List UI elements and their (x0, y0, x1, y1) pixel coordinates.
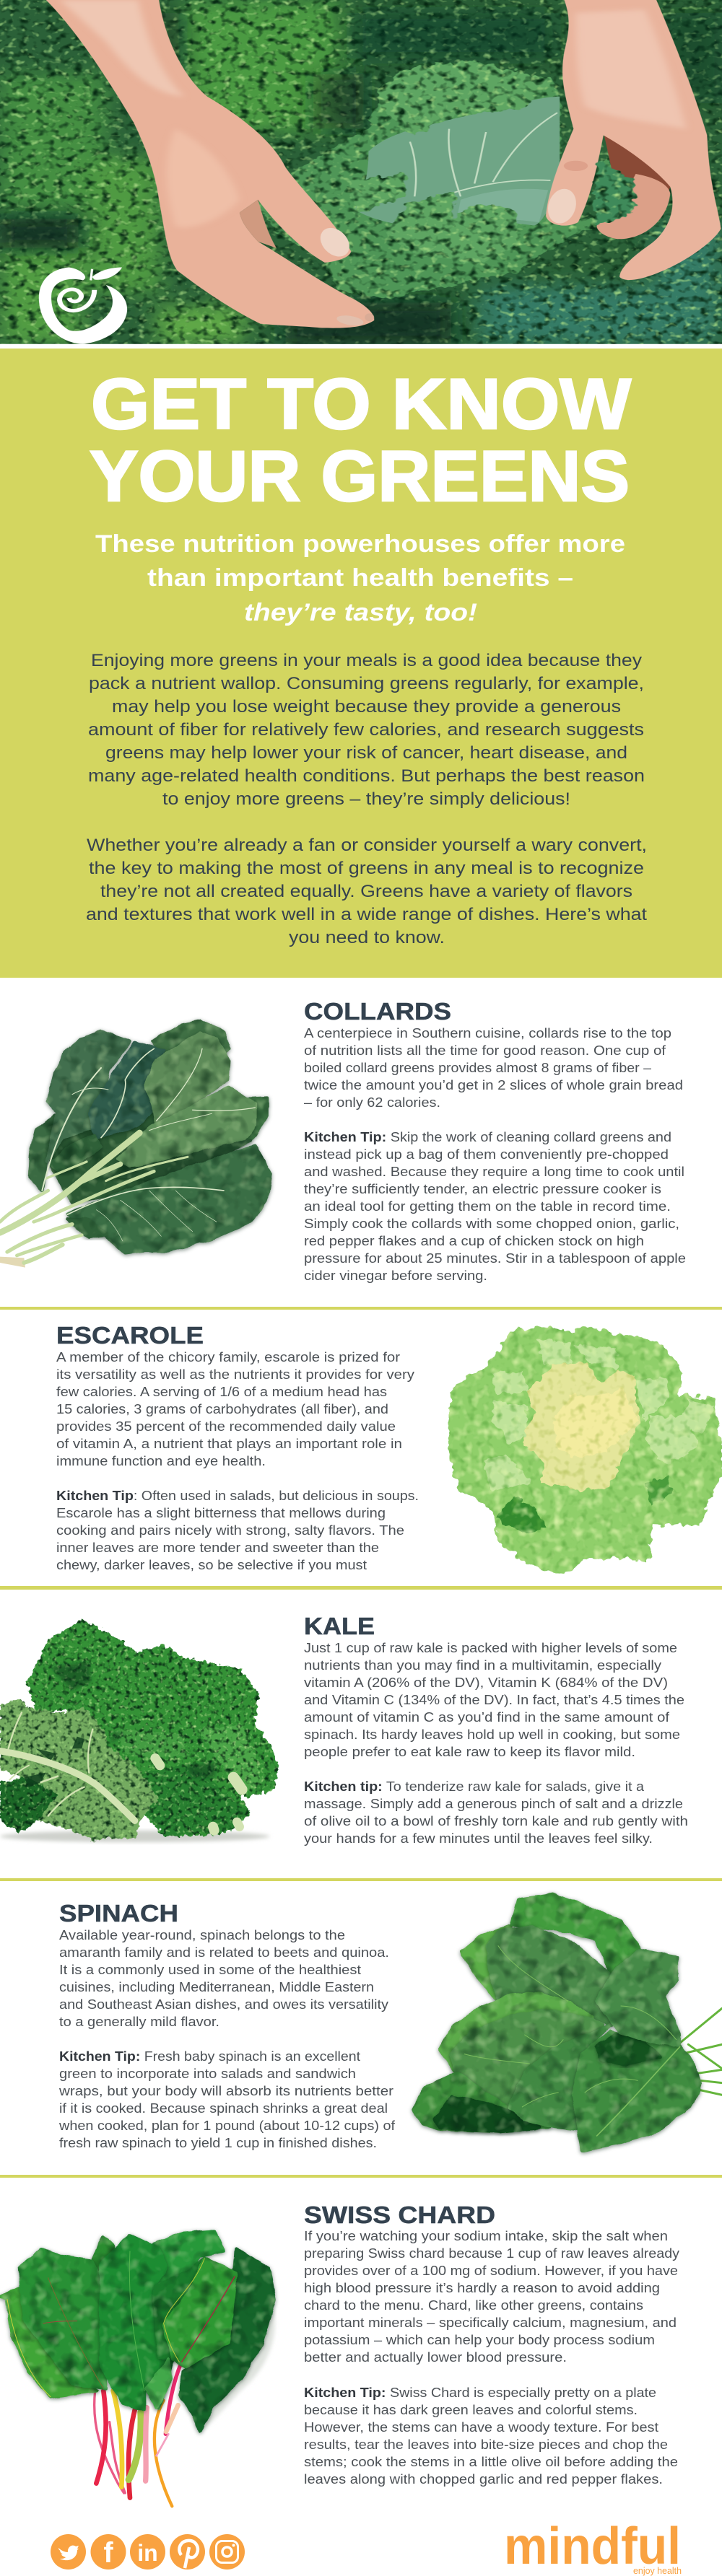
text: collards kitchen tip: cider vinegar before serving. (304, 1269, 487, 1283)
text: kale kitchen tip (304, 1779, 688, 1846)
icon: pinterest (170, 2534, 205, 2570)
text: escarole description: A member of the chicory family, escarole is prized for (56, 1350, 400, 1364)
text: kale description (304, 1641, 684, 1759)
intro paragraph 1: to enjoy more greens – they’re simply delicious! (162, 789, 570, 809)
text: spinach description: amaranth family and is related to beets and quinoa. (59, 1945, 389, 1960)
text: collards kitchen tip: they’re sufficiently tender, an electric pressure cooker is (304, 1182, 661, 1196)
text: swiss chard kitchen tip: leaves along with chopped garlic and red pepper flakes. (304, 2472, 663, 2487)
panel: swiss chard (0, 2202, 679, 2506)
text: kale description: Just 1 cup of raw kale is packed with higher levels of some (304, 1641, 677, 1655)
text: collards kitchen tip: red pepper flakes and a cup of chicken stock on high (304, 1234, 644, 1248)
intro paragraph 2: you need to know. (289, 928, 445, 947)
icon: twitter (51, 2534, 86, 2570)
panel: kale (0, 1613, 688, 1846)
text: kale description: nutrients than you may find in a multivitamin, especially (304, 1658, 661, 1673)
heading: swiss chard: SWISS CHARD (304, 2202, 495, 2228)
subtitle (95, 530, 625, 626)
text: escarole description (56, 1350, 414, 1468)
text: spinach kitchen tip: if it is cooked. Because spinach shrinks a great deal (59, 2101, 388, 2116)
text: swiss chard kitchen tip: because it has dark green leaves and colorful stems. (304, 2403, 638, 2417)
text: kale kitchen tip: massage. Simply add a generous pinch of salt and a drizzle (304, 1797, 683, 1811)
text: spinach description: It is a commonly used in some of the healthiest (59, 1963, 361, 1977)
intro paragraph 2: and textures that work well in a wide range of dishes. Here’s what (86, 905, 647, 924)
intro paragraph 1 (88, 651, 645, 809)
panel: spinach (58, 1896, 722, 2150)
text: escarole kitchen tip: Escarole has a slight bitterness that mellows during (56, 1506, 386, 1520)
text: swiss chard description: preparing Swiss chard because 1 cup of raw leaves already (304, 2246, 679, 2261)
right hand (545, 0, 721, 280)
icon: facebook: f (103, 2537, 113, 2569)
text: collards description: twice the amount you’d get in 2 slices of whole grain bread (304, 1078, 683, 1092)
text: swiss chard description: potassium – which can help your body process sodium (304, 2333, 655, 2347)
text: collards description: of nutrition lists all the time for good reason. One cup of (304, 1043, 666, 1058)
text: escarole description: its versatility as well as the nutrients it provides for very (56, 1367, 414, 1382)
intro paragraph 2: Whether you’re already a fan or consider yourself a wary convert, (87, 836, 647, 855)
text: swiss chard description: If you’re watching your sodium intake, skip the salt when (304, 2229, 668, 2243)
text: escarole description: 15 calories, 3 grams of carbohydrates (all fiber), and (56, 1402, 388, 1416)
photo: swiss chard (0, 2231, 275, 2506)
dark shadows in the foliage (0, 13, 722, 344)
text: spinach kitchen tip: fresh raw spinach to yield 1 cup in finished dishes. (59, 2136, 377, 2150)
panel: escarole (56, 1322, 722, 1574)
icon: linkedin (130, 2534, 165, 2570)
curly kale leaf frill (258, 61, 638, 299)
intro paragraph 1: amount of fiber for relatively few calories, and research suggests (88, 720, 644, 740)
icon: facebook (91, 2534, 126, 2570)
text: escarole kitchen tip (56, 1489, 419, 1572)
text: swiss chard kitchen tip: results, tear the leaves into bite-size pieces and chop the (304, 2437, 668, 2452)
intro paragraph 1: Enjoying more greens in your meals is a good idea because they (91, 651, 642, 670)
text: kale kitchen tip: Kitchen tip: To tenderize raw kale for salads, give it a (304, 1779, 645, 1794)
heading: spinach: SPINACH (59, 1900, 178, 1927)
text: swiss chard kitchen tip: Kitchen Tip: Swiss Chard is especially pretty on a plate (304, 2386, 656, 2400)
text: spinach kitchen tip: green to incorporate into salads and sandwich (59, 2067, 356, 2081)
text: swiss chard description: better and actually lower blood pressure. (304, 2350, 567, 2365)
text: swiss chard kitchen tip: However, the stems can have a woody texture. For best (304, 2420, 658, 2435)
icon: instagram (209, 2534, 245, 2570)
text: kale description: and Vitamin C (134% of the DV). In fact, that’s 4.5 times the (304, 1693, 684, 1707)
text: collards kitchen tip (304, 1130, 686, 1283)
subtitle: than important health benefits – (147, 564, 573, 592)
text: swiss chard description (304, 2229, 679, 2365)
text: spinach description: Available year-round, spinach belongs to the (59, 1928, 345, 1942)
text: swiss chard kitchen tip: stems; cook the stems in a little olive oil before adding the (304, 2455, 678, 2469)
hero photo: hands holding kale (0, 0, 722, 364)
text: collards kitchen tip: instead pick up a bag of them conveniently pre-chopped (304, 1147, 669, 1162)
text: spinach kitchen tip: Kitchen Tip: Fresh baby spinach is an excellent (59, 2049, 360, 2064)
text: escarole description: immune function and eye health. (56, 1454, 266, 1468)
footer: social icons (51, 2534, 245, 2570)
photo: collards (0, 1021, 271, 1268)
text: kale description: people prefer to eat kale raw to keep its flavor mild. (304, 1745, 635, 1759)
text: collards kitchen tip: an ideal tool for getting them on the table in record time. (304, 1199, 671, 1214)
text: kale kitchen tip: your hands for a few minutes until the leaves feel silky. (304, 1831, 653, 1846)
heading: kale: KALE (304, 1613, 375, 1639)
text: swiss chard description: chard to the menu. Chard, like other greens, contains (304, 2298, 643, 2313)
text: swiss chard description: high blood pressure it’s hardly a reason to avoid adding (304, 2281, 660, 2295)
text: escarole kitchen tip: cooking and pairs nicely with strong, salty flavors. The (56, 1523, 404, 1538)
icon: linkedin: in (137, 2540, 158, 2566)
text: escarole kitchen tip: Kitchen Tip : Often used in salads, but delicious in soups. (56, 1489, 419, 1503)
text: spinach description: cuisines, including Mediterranean, Middle Eastern (59, 1980, 374, 1994)
text: kale description: vitamin A (206% of the DV), Vitamin K (684% of the DV) (304, 1675, 668, 1690)
text: spinach description: and Southeast Asian dishes, and owes its versatility (59, 1997, 388, 2012)
photo: spinach (414, 1896, 722, 2150)
kale leaf centre (355, 97, 560, 227)
logo: apple swirl (39, 268, 127, 344)
white rule under hero (0, 344, 722, 349)
title: GET TO KNOW (91, 364, 632, 444)
text: swiss chard kitchen tip (304, 2386, 678, 2487)
text: escarole description: few calories. A serving of 1/6 of a medium head has (56, 1385, 387, 1399)
text: kale description: spinach. Its hardy leaves hold up well in cooking, but some (304, 1727, 680, 1742)
text: escarole description: provides 35 percent of the recommended daily value (56, 1419, 396, 1434)
text: collards kitchen tip: Kitchen Tip: Skip the work of cleaning collard greens and (304, 1130, 671, 1144)
intro paragraph 2: they’re not all created equally. Greens have a variety of flavors (100, 882, 632, 901)
intro paragraph 1: pack a nutrient wallop. Consuming greens regularly, for example, (89, 674, 644, 693)
text: collards kitchen tip: and washed. Because they require a long time to cook until (304, 1165, 684, 1179)
footer: mindful logo: mindful (504, 2518, 681, 2575)
text: kale kitchen tip: of olive oil to a bowl of freshly torn kale and rub gently with (304, 1814, 688, 1828)
text: spinach kitchen tip: when cooked, plan for 1 pound (about 10-12 cups) of (58, 2119, 396, 2133)
heading: collards: COLLARDS (304, 998, 451, 1025)
intro paragraph 2: the key to making the most of greens in any meal is to recognize (89, 859, 644, 878)
text: swiss chard description: important minerals – specifically calcium, magnesium, and (304, 2316, 677, 2330)
intro paragraph 1: many age-related health conditions. But perhaps the best reason (88, 766, 645, 786)
intro paragraph 2 (86, 836, 647, 947)
text: collards kitchen tip: Simply cook the collards with some chopped onion, garlic, (304, 1217, 679, 1231)
text: collards description (304, 1026, 683, 1110)
text: escarole kitchen tip: chewy, darker leaves, so be selective if you must (56, 1558, 367, 1572)
text: spinach description: to a generally mild flavor. (59, 2015, 219, 2029)
intro paragraph 1: may help you lose weight because they provide a generous (112, 697, 621, 717)
text: swiss chard description: provides over of a 100 mg of sodium. However, if you have (304, 2264, 678, 2278)
text: escarole kitchen tip: inner leaves are more tender and sweeter than the (56, 1541, 379, 1555)
title: YOUR GREENS (90, 436, 630, 516)
text: spinach kitchen tip (58, 2049, 396, 2150)
text: spinach kitchen tip: wraps, but your body will absorb its nutrients better (58, 2084, 393, 2098)
text: escarole description: of vitamin A, a nutrient that plays an important role in (56, 1437, 402, 1451)
intro paragraph 1: greens may help lower your risk of cancer, heart disease, and (105, 743, 627, 763)
left hand (46, 0, 374, 328)
panel: intro (0, 349, 722, 978)
text: collards kitchen tip: pressure for about 25 minutes. Stir in a tablespoon of apple (304, 1251, 686, 1266)
subtitle: they’re tasty, too! (244, 599, 477, 626)
text: collards description: boiled collard greens provides almost 8 grams of fiber – (304, 1061, 651, 1075)
text: spinach description (59, 1928, 389, 2029)
heading: escarole: ESCAROLE (56, 1322, 204, 1349)
photo: escarole (448, 1326, 722, 1574)
footer: mindful logo: enjoy health (633, 2565, 682, 2576)
photo: kale (0, 1618, 279, 1842)
text: collards description: – for only 62 calories. (304, 1095, 440, 1110)
panel: collards (0, 998, 686, 1283)
title (90, 364, 632, 516)
subtitle: These nutrition powerhouses offer more (95, 530, 625, 558)
text: kale description: amount of vitamin C as you’d find in the same amount of (304, 1710, 670, 1725)
text: collards description: A centerpiece in Southern cuisine, collards rise to the top (304, 1026, 671, 1041)
